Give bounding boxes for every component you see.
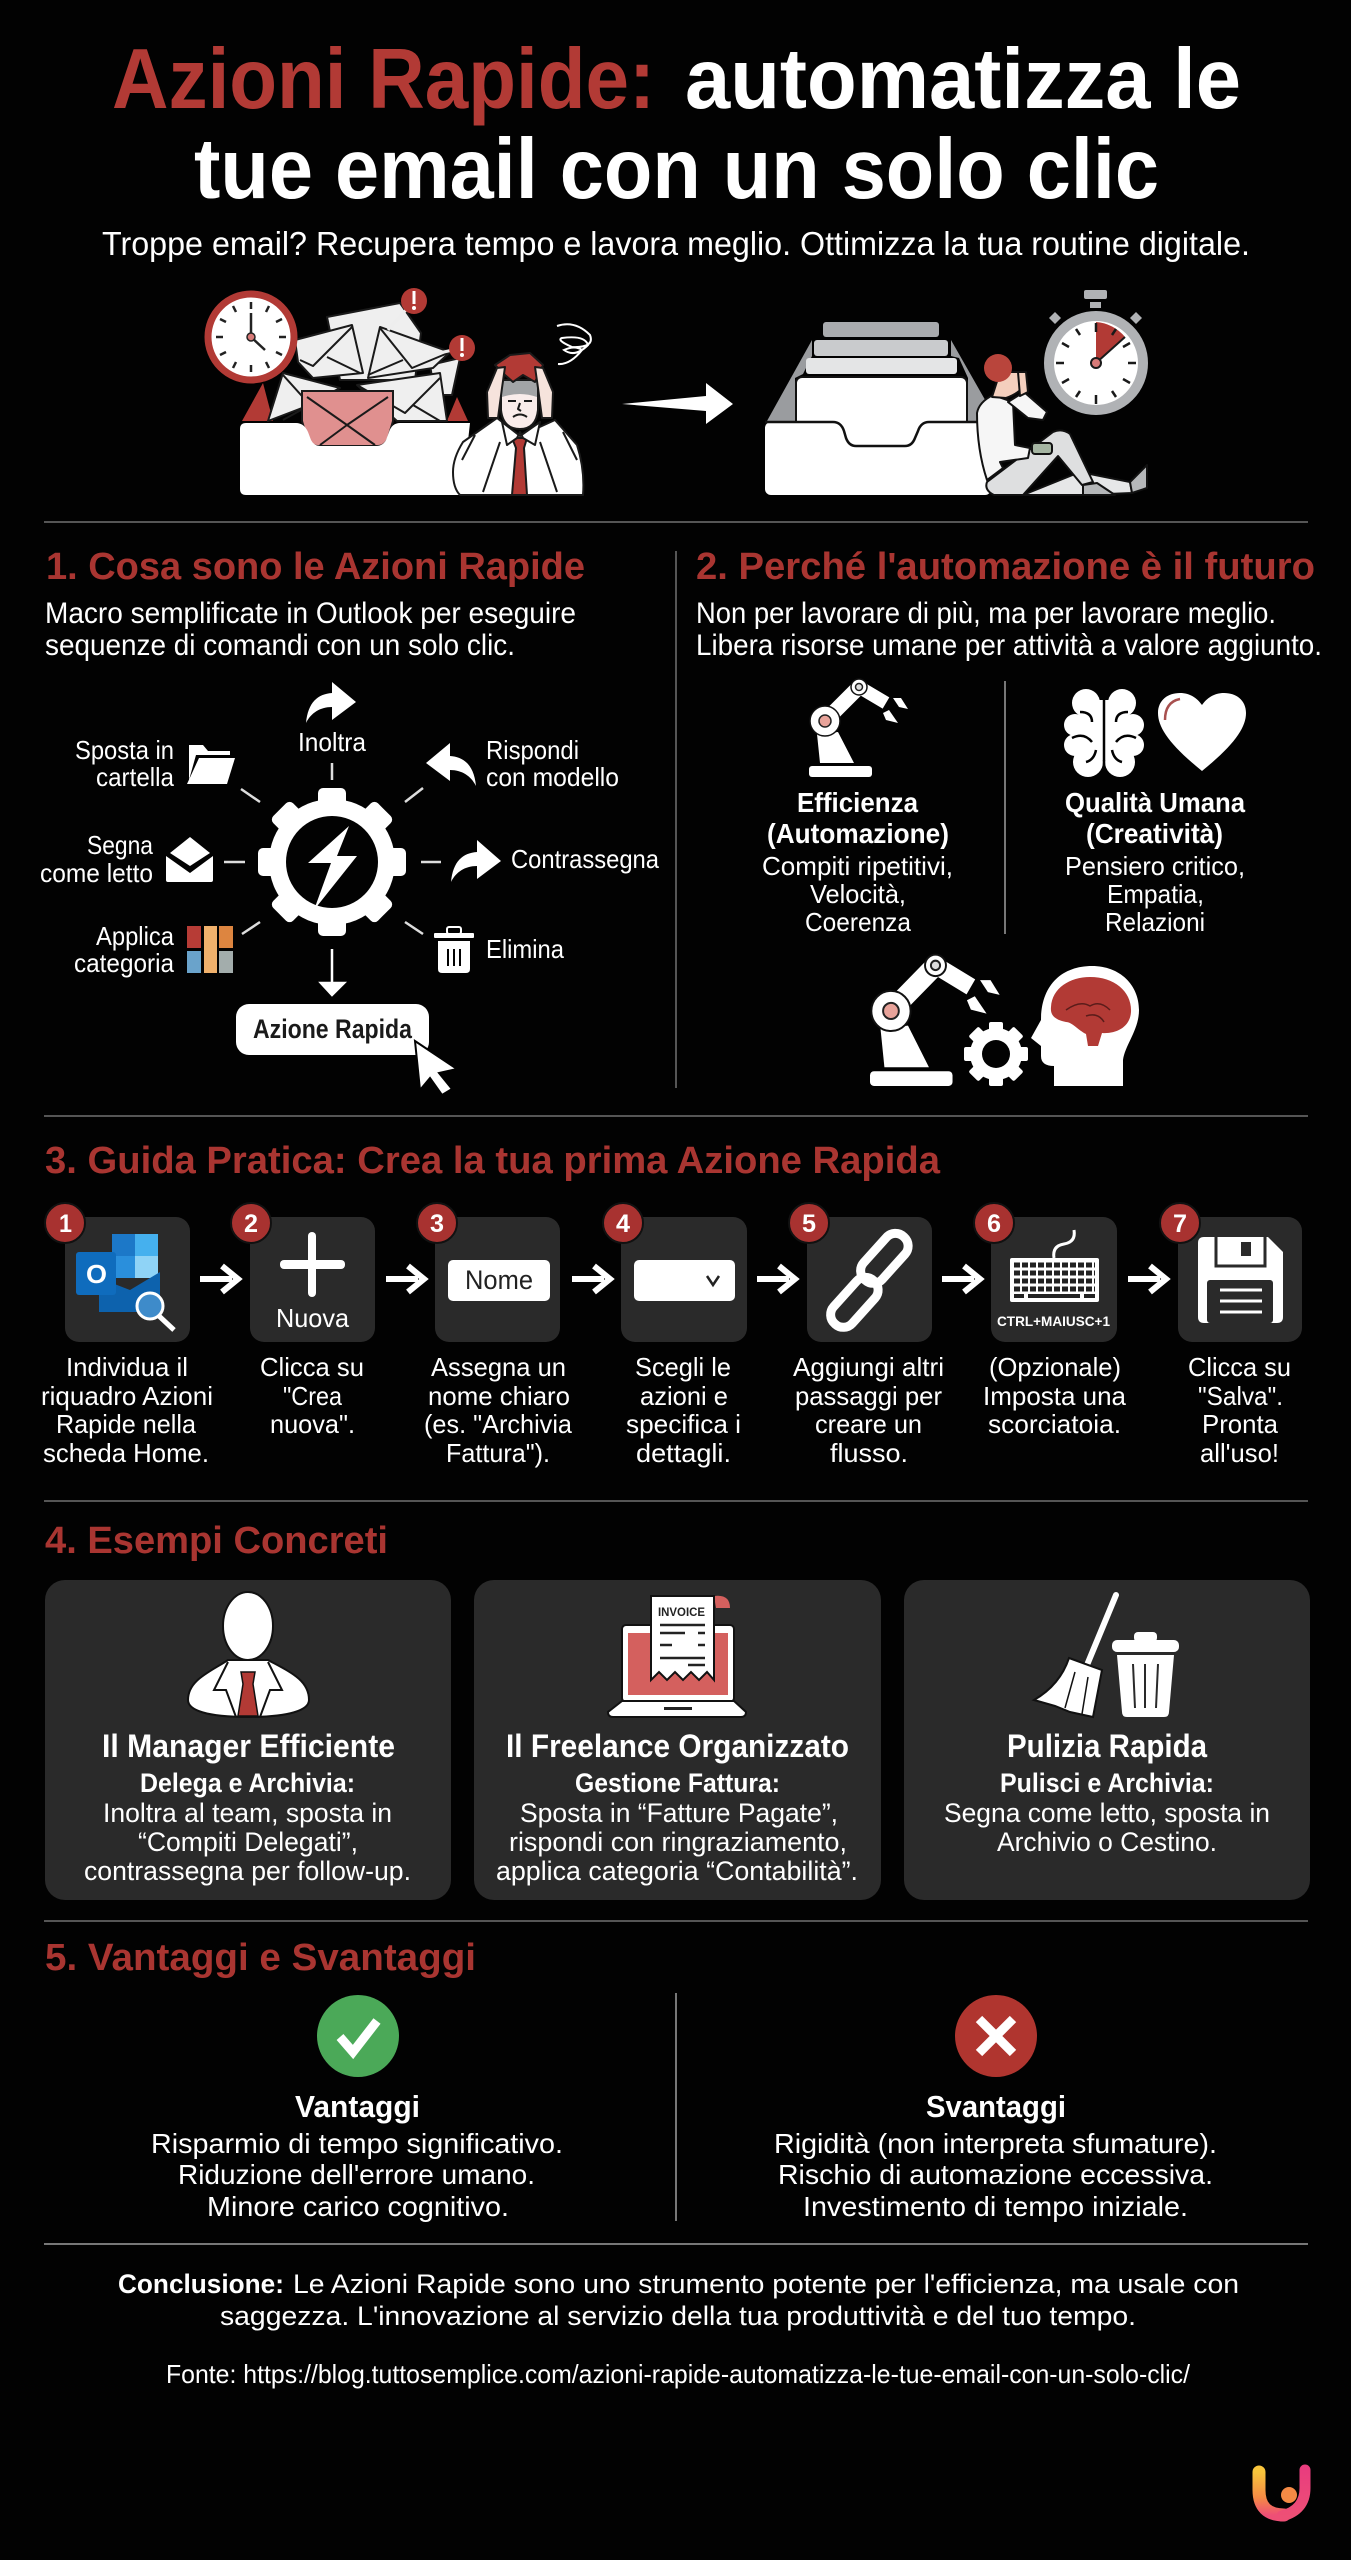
step 5: Aggiungi altri: [793, 1352, 944, 1382]
conclusion: saggezza. L'innovazione al servizio della tua produttività e del tuo tempo.: [220, 2301, 1136, 2331]
arrow: step 5 to 6: [942, 1266, 980, 1292]
arrow: step 2 to 3: [386, 1266, 424, 1292]
icon: mouse cursor: [415, 1041, 457, 1095]
item: sposta in cartella: Sposta in: [75, 735, 174, 765]
title: tue email con un solo clic: [194, 122, 1159, 217]
step 6: CTRL+MAIUSC+1: [997, 1313, 1110, 1329]
step 2: Nuova: [276, 1303, 350, 1333]
efficiency text: Efficienza: [797, 787, 918, 818]
description: Macro semplificate in Outlook per eseguire: [45, 597, 576, 630]
step 2: "Crea: [283, 1381, 342, 1411]
gear with lightning bolt: [258, 788, 406, 936]
icon: brain: [1064, 689, 1144, 777]
card: quick clean: Archivio o Cestino.: [997, 1827, 1217, 1857]
step 6: 6: [987, 1210, 1001, 1238]
item: rispondi con modello: [426, 735, 619, 792]
card: freelance: Il Freelance Organizzato: [506, 1728, 849, 1764]
description: Non per lavorare di più, ma per lavorare meglio.: [696, 597, 1276, 630]
human quality text: [1065, 787, 1245, 937]
step 3: Nome: [465, 1265, 533, 1295]
step 3: Fattura").: [446, 1438, 550, 1468]
human quality text: Qualità Umana: [1065, 787, 1245, 818]
efficiency text: Velocità,: [810, 879, 906, 909]
item: inoltra: Inoltra: [298, 727, 367, 757]
human quality text: Pensiero critico,: [1065, 851, 1245, 881]
step 1: O: [86, 1259, 107, 1289]
stress scribble: [557, 324, 591, 364]
card: quick clean: [904, 1580, 1310, 1900]
item: elimina: Elimina: [486, 934, 564, 964]
card: quick clean: Pulizia Rapida: [1007, 1728, 1207, 1764]
relaxed person: [977, 354, 1147, 495]
disadvantages: Rischio di automazione eccessiva.: [778, 2159, 1213, 2190]
step 1: Rapide nella: [56, 1409, 197, 1439]
icon: heart: [1158, 693, 1246, 771]
icon: trash bin: [1112, 1632, 1179, 1717]
advantages: Vantaggi: [295, 2089, 420, 2124]
step 3: 3: [430, 1210, 444, 1238]
human quality text: Empatia,: [1107, 879, 1204, 909]
icon: cross: [955, 1995, 1037, 2077]
panel: section 3 guide: [41, 1140, 1302, 1468]
stopwatch: [1049, 290, 1143, 410]
conclusion: [118, 2269, 1239, 2331]
disadvantages: Rigidità (non interpreta sfumature).: [774, 2128, 1217, 2159]
arrow: step 6 to 7: [1128, 1266, 1166, 1292]
panel: section 1: [40, 546, 659, 1095]
card: quick clean: Segna come letto, sposta in: [944, 1798, 1270, 1828]
item: elimina: [434, 927, 564, 973]
efficiency text: Coerenza: [805, 907, 912, 937]
step 3: nome chiaro: [428, 1381, 570, 1411]
subtitle: Troppe email? Recupera tempo e lavora meglio. Ottimizza la tua routine digitale.: [102, 225, 1250, 262]
human quality text: Relazioni: [1105, 907, 1205, 937]
step 7: Clicca su: [1188, 1352, 1291, 1382]
heading: 1. Cosa sono le Azioni Rapide: [46, 546, 585, 588]
step 4: azioni e: [640, 1381, 728, 1411]
alert badges: [388, 288, 475, 361]
step 5: [789, 1203, 944, 1468]
tray front: [765, 422, 991, 495]
step 1: riquadro Azioni: [41, 1381, 213, 1411]
card: freelance: rispondi con ringraziamento,: [509, 1827, 847, 1857]
conclusion: Conclusione:: [118, 2269, 284, 2299]
button: azione rapida: [236, 1004, 429, 1055]
panel: section 2: [696, 546, 1322, 1086]
panel: section 5 pros and cons: [45, 1937, 1217, 2222]
disadvantages: Svantaggi: [926, 2089, 1066, 2124]
conclusion: Le Azioni Rapide sono uno strumento potente per l'efficienza, ma usale con: [293, 2269, 1239, 2299]
step 5: flusso.: [830, 1438, 908, 1468]
clock: [208, 294, 294, 380]
human quality text: (Creatività): [1086, 818, 1223, 849]
arrow: step 4 to 5: [757, 1266, 795, 1292]
step 7: Pronta: [1202, 1409, 1279, 1439]
card: manager: [45, 1580, 451, 1900]
tray front: [240, 423, 470, 495]
card: freelance: Sposta in “Fatture Pagate”,: [520, 1798, 838, 1828]
icon: laptop with invoice: [608, 1596, 746, 1717]
step 3: (es. "Archivia: [424, 1409, 573, 1439]
efficiency text: Compiti ripetitivi,: [762, 851, 953, 881]
card: manager: contrassegna per follow-up.: [84, 1856, 411, 1886]
advantages: [151, 2089, 563, 2222]
source: Fonte: https://blog.tuttosemplice.com/azioni-rapide-automatizza-le-tue-email-con-un-solo-clic/: [166, 2359, 1191, 2389]
heading: 2. Perché l'automazione è il futuro: [696, 546, 1315, 588]
step 3: [417, 1203, 573, 1468]
disadvantages: Investimento di tempo iniziale.: [803, 2191, 1188, 2222]
step 7: 7: [1173, 1210, 1187, 1238]
step 4: [603, 1203, 747, 1468]
item: sposta in cartella: [75, 735, 235, 792]
description: sequenze di comandi con un solo clic.: [45, 629, 515, 662]
illustration: overwhelmed inbox: [208, 288, 591, 495]
heading: 4. Esempi Concreti: [45, 1520, 388, 1562]
step 2: Clicca su: [260, 1352, 364, 1382]
stressed man: [453, 353, 583, 495]
card: freelance: [474, 1580, 881, 1900]
step 5: passaggi per: [795, 1381, 942, 1411]
efficiency text: [762, 787, 953, 937]
icon: broom: [1034, 1595, 1116, 1717]
item: contrassegna: Contrassegna: [511, 844, 659, 874]
step 6: (Opzionale): [989, 1352, 1121, 1382]
card: manager: Inoltra al team, sposta in: [103, 1798, 392, 1828]
item: applica categoria: Applica: [96, 921, 174, 951]
card: manager: Delega e Archivia:: [140, 1768, 355, 1798]
arrow: step 1 to 2: [200, 1266, 238, 1292]
icon: robot arm: [809, 679, 908, 777]
description: [696, 597, 1322, 662]
item: contrassegna: [451, 840, 659, 882]
step 2: 2: [244, 1210, 258, 1238]
advantages: Riduzione dell'errore umano.: [178, 2159, 535, 2190]
description: [45, 597, 576, 662]
arrow: before to after: [622, 383, 733, 424]
disadvantages: [774, 2089, 1217, 2222]
step 7: "Salva".: [1198, 1381, 1283, 1411]
heading: 5. Vantaggi e Svantaggi: [45, 1937, 476, 1979]
step 1: Individua il: [66, 1352, 188, 1382]
step 6: [974, 1203, 1127, 1439]
illustration: robot arm, gear and human head: [870, 955, 1139, 1086]
step 6: scorciatoia.: [988, 1409, 1121, 1439]
step 2: [231, 1203, 375, 1439]
card: freelance: applica categoria “Contabilità”.: [496, 1856, 858, 1886]
icon: laptop with invoice: INVOICE: [658, 1605, 705, 1619]
envelope pile: [268, 303, 460, 421]
efficiency text: (Automazione): [767, 818, 949, 849]
icon: manager: [188, 1592, 309, 1717]
step 4: 4: [616, 1210, 630, 1238]
arrow: down to button: [321, 949, 344, 995]
title: automatizza le: [685, 32, 1241, 127]
step 7: [1160, 1203, 1302, 1468]
step 6: Imposta una: [983, 1381, 1127, 1411]
button: azione rapida: Azione Rapida: [253, 1014, 413, 1044]
item: inoltra: [298, 682, 367, 757]
illustration: organized inbox: [765, 290, 1147, 495]
step 2: nuova".: [270, 1409, 355, 1439]
step 5: 5: [802, 1210, 816, 1238]
step 3: Assegna un: [431, 1352, 566, 1382]
step 1: 1: [59, 1210, 72, 1238]
item: applica categoria: [74, 921, 233, 978]
card: freelance: Gestione Fattura:: [575, 1768, 780, 1798]
item: segna come letto: [40, 830, 213, 888]
step 1: scheda Home.: [43, 1438, 209, 1468]
card: manager: “Compiti Delegati”,: [138, 1827, 358, 1857]
item: segna come letto: come letto: [40, 858, 153, 888]
icon: check: [317, 1995, 399, 2077]
panel: section 4 examples: [45, 1520, 1310, 1900]
card: quick clean: Pulisci e Archivia:: [1000, 1768, 1214, 1798]
step 7: all'uso!: [1200, 1438, 1279, 1468]
card: manager: Il Manager Efficiente: [102, 1728, 395, 1764]
step 4: dettagli.: [636, 1438, 731, 1468]
arrow: step 3 to 4: [572, 1266, 610, 1292]
advantages: Risparmio di tempo significativo.: [151, 2128, 563, 2159]
logo: [1259, 2470, 1305, 2516]
red envelope: [302, 391, 393, 446]
step 4: specifica i: [626, 1409, 741, 1439]
item: rispondi con modello: con modello: [486, 762, 619, 792]
heading: 3. Guida Pratica: Crea la tua prima Azione Rapida: [45, 1140, 941, 1182]
step 5: creare un: [815, 1409, 922, 1439]
item: segna come letto: Segna: [87, 830, 153, 860]
step 1: [41, 1203, 213, 1468]
item: applica categoria: categoria: [74, 948, 174, 978]
advantages: Minore carico cognitivo.: [207, 2191, 509, 2222]
item: sposta in cartella: cartella: [96, 762, 174, 792]
title: [112, 32, 1241, 217]
step 4: Scegli le: [635, 1352, 731, 1382]
title: Azioni Rapide:: [112, 32, 655, 127]
item: rispondi con modello: Rispondi: [486, 735, 579, 765]
